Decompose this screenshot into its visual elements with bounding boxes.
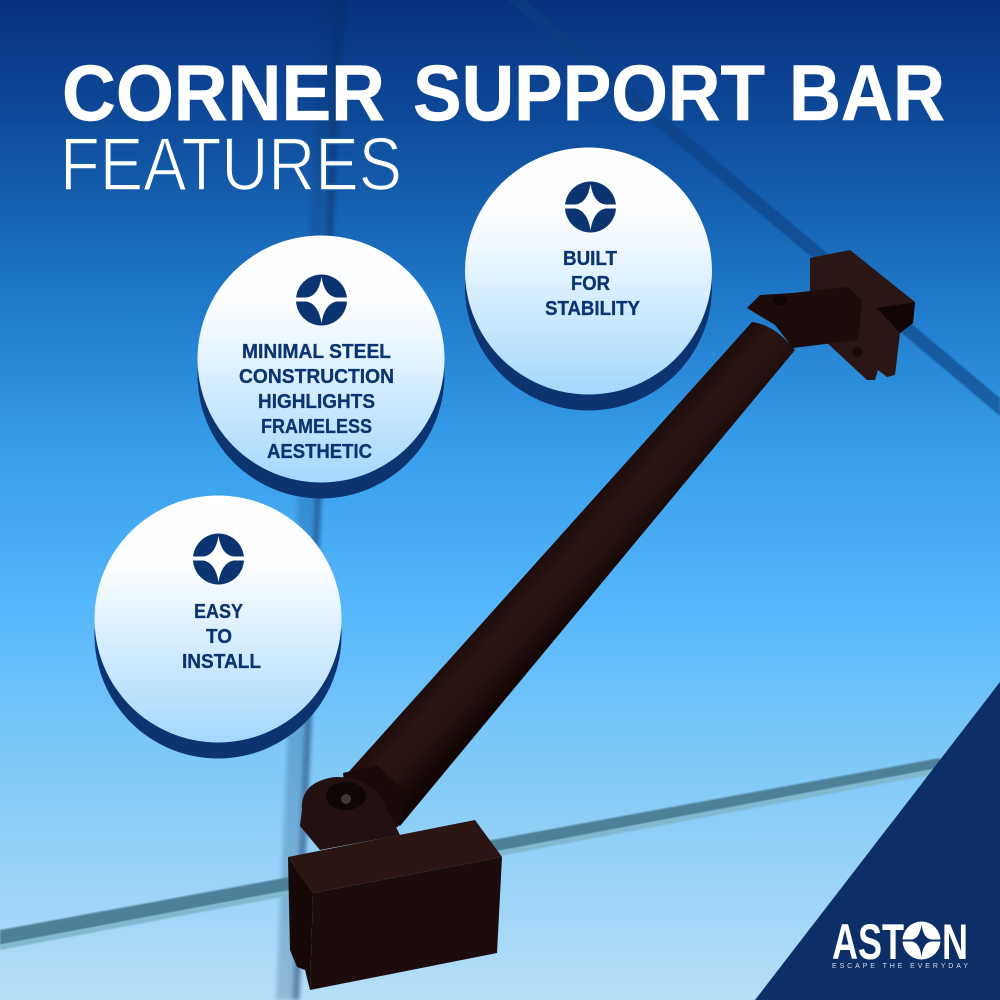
logo letter n: N: [942, 914, 968, 970]
icon: star badge: [296, 274, 348, 326]
disc: [94, 496, 342, 742]
icon: star badge: [192, 534, 244, 584]
label: [182, 601, 261, 673]
disc shadow: [94, 512, 342, 758]
feature: minimal steel construction: [198, 236, 444, 498]
label: STABILITY: [545, 298, 641, 320]
lower bracket: [288, 820, 502, 990]
label: HIGHLIGHTS: [258, 391, 375, 413]
corner triangle: [755, 682, 1000, 1000]
feature: easy to install: [94, 496, 342, 758]
title: [60, 48, 945, 206]
label: FRAMELESS: [261, 416, 372, 438]
label: BUILT: [563, 248, 617, 270]
logo: aston: [832, 914, 968, 970]
label: EASY: [194, 601, 244, 623]
lower swivel: [300, 765, 407, 850]
product: corner support bar: [288, 250, 915, 990]
label: MINIMAL STEEL: [242, 341, 391, 363]
label: AESTHETIC: [267, 441, 372, 463]
heading: features: FEATURES: [60, 122, 402, 206]
heading: corner support bar: BAR: [789, 48, 945, 137]
disc: [465, 148, 712, 394]
heading: corner support bar: CORNER: [62, 48, 385, 137]
heading: corner support bar: SUPPORT: [413, 48, 765, 137]
heading: corner support bar: [62, 48, 945, 137]
rod: [345, 322, 795, 826]
logo star: [902, 922, 941, 960]
upper bracket: [747, 250, 915, 380]
feature: built for stability: [465, 148, 712, 410]
logo wordmark: AST: [832, 914, 904, 970]
icon: star badge: [564, 182, 616, 232]
disc shadow: [465, 164, 712, 410]
label: FOR: [571, 273, 611, 295]
disc shadow: [198, 252, 444, 498]
label: CONSTRUCTION: [239, 366, 394, 388]
logo tagline: ESCAPE THE EVERYDAY: [832, 963, 968, 970]
label: TO: [206, 626, 232, 648]
label: [545, 248, 641, 320]
label: [239, 341, 394, 463]
label: INSTALL: [182, 651, 261, 673]
disc: [198, 236, 444, 482]
